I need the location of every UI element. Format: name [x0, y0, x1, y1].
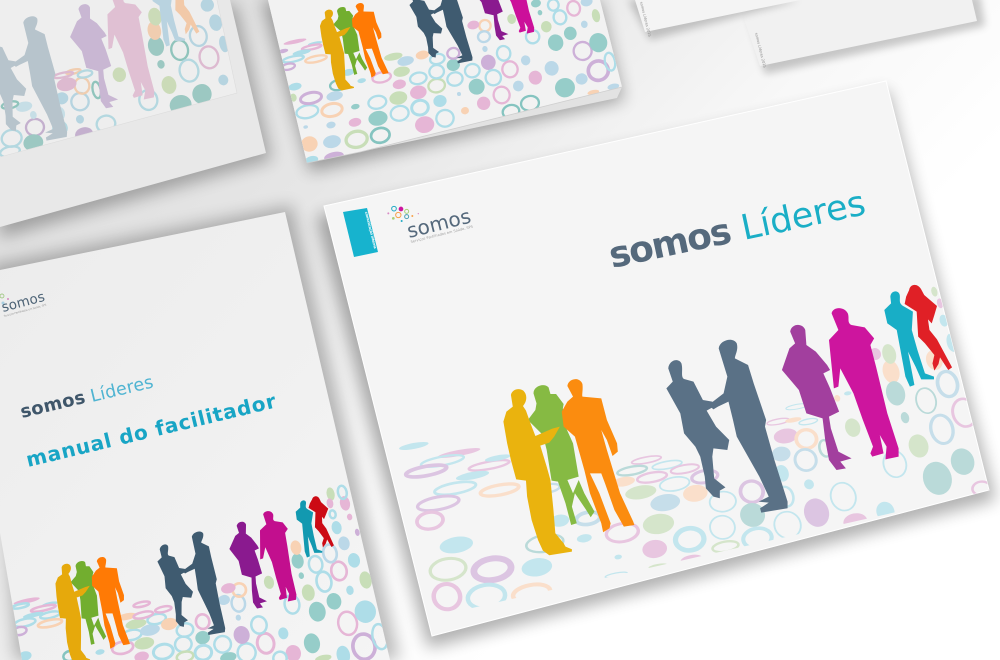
dot pattern [278, 0, 620, 165]
logo: somos: somos [404, 204, 473, 243]
dot pattern [398, 286, 992, 612]
silhouettes [317, 0, 538, 92]
text: manual do facilitador: manual do facilitador [24, 389, 278, 472]
panel: top centre folded brochure [262, 0, 624, 172]
silhouettes: purple woman and magenta man [782, 308, 899, 470]
title: somos Líderes: Líderes [738, 183, 869, 249]
panel: left manual cover [0, 205, 400, 660]
small logo: somos [0, 289, 47, 316]
faded silhouettes [0, 0, 204, 142]
title: somos Líderes: somos [605, 211, 735, 277]
panel: faded top-left sheet [0, 0, 272, 238]
panel: main landscape cover [316, 81, 996, 648]
sheet footer text: somos Líderes 2015 [754, 32, 767, 68]
silhouettes: handshake [666, 340, 788, 513]
sheet footer text: somos Líderes 2015 [639, 1, 652, 37]
teal side tab [343, 208, 378, 257]
faded dot pattern [0, 0, 230, 159]
dot pattern [12, 485, 390, 660]
silhouettes: teal man and red woman [884, 285, 952, 387]
panel: top right sheets [628, 0, 985, 74]
small logo: Serviços Partilhados em Saúde, SPS [3, 303, 47, 318]
silhouettes [48, 496, 339, 660]
title: somos Líderes [605, 183, 869, 277]
text: somos Líderes: somos [18, 387, 87, 423]
teal side tab: comunicação interna [364, 211, 377, 250]
logo: somos: Serviços Partilhados em Saúde, SPS [410, 225, 473, 244]
text: somos Líderes [18, 372, 155, 423]
silhouettes: group of three [503, 379, 634, 555]
text: somos Líderes: Líderes [88, 372, 155, 407]
